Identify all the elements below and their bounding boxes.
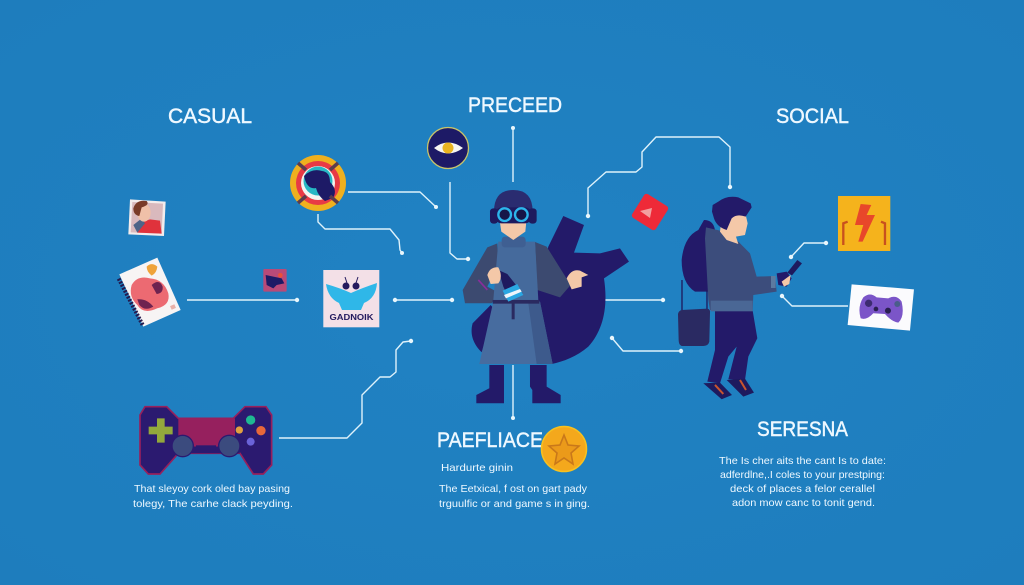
icon: ring emblem — [290, 155, 346, 211]
text block: casual description: tolegy, The carhe clack peyding. — [133, 498, 293, 510]
hair — [712, 197, 752, 230]
face — [499, 218, 527, 240]
card label: GADNOIK — [330, 313, 374, 322]
text block: paefliace description — [439, 462, 590, 510]
text block: seresna description: deck of places a felor cerallel — [730, 483, 875, 495]
backpack — [682, 220, 715, 292]
heart silhouette — [537, 216, 629, 364]
icon: notebook — [119, 258, 181, 327]
shoulder bag — [678, 309, 710, 346]
text block: paefliace description: Hardurte ginin — [441, 462, 513, 474]
phone and hand — [787, 260, 802, 275]
connector lines — [187, 126, 848, 438]
bag straps — [682, 280, 707, 310]
hoodie — [705, 227, 777, 310]
tunic skirt — [479, 302, 553, 364]
torso — [493, 242, 538, 300]
icon: bird logo card — [323, 270, 379, 327]
heading: casual: CASUAL — [168, 105, 252, 128]
icon: portrait photo — [128, 199, 166, 236]
icon: lightning tile — [838, 196, 890, 251]
text block: paefliace description: The Eetxical, f ost on gart pady — [439, 483, 588, 495]
neck — [502, 237, 526, 247]
icon: small badge — [263, 269, 287, 292]
shoes — [703, 383, 732, 399]
character: social figure with phone — [678, 197, 802, 399]
text block: casual description — [133, 483, 293, 510]
heading: preceed: PRECEED — [468, 94, 562, 117]
text block: seresna description: The Is cher aits the cant Is to date: — [719, 455, 886, 467]
sleeves — [463, 243, 500, 303]
icon: eye badge — [428, 128, 468, 168]
held device — [498, 270, 523, 301]
icon: star coin — [542, 426, 586, 472]
cloak — [472, 305, 495, 352]
d-pad — [149, 418, 173, 443]
character: central figure with heart — [463, 190, 629, 403]
hair — [494, 190, 533, 212]
heading: social: SOCIAL — [776, 105, 849, 128]
text block: seresna description: adferdlne,.I coles to your prestping: — [720, 469, 885, 481]
icon: purple controller card — [848, 284, 914, 331]
heading: seresna: SERESNA — [757, 418, 848, 441]
headset — [490, 208, 498, 224]
text block: seresna description — [719, 455, 886, 509]
head — [720, 212, 748, 244]
icon: game controller — [140, 407, 272, 474]
legs and boots — [476, 365, 561, 403]
icon: red play tile — [631, 193, 669, 231]
hands — [487, 267, 501, 284]
text block: paefliace description: trguulfic or and game s in ging. — [439, 498, 590, 510]
text block: casual description: That sleyoy cork oled bay pasing — [134, 483, 290, 495]
text block: seresna description: adon mow canc to tonit gend. — [732, 497, 875, 509]
legs — [707, 311, 757, 383]
heading: paefliace: PAEFLIACE — [437, 429, 543, 452]
